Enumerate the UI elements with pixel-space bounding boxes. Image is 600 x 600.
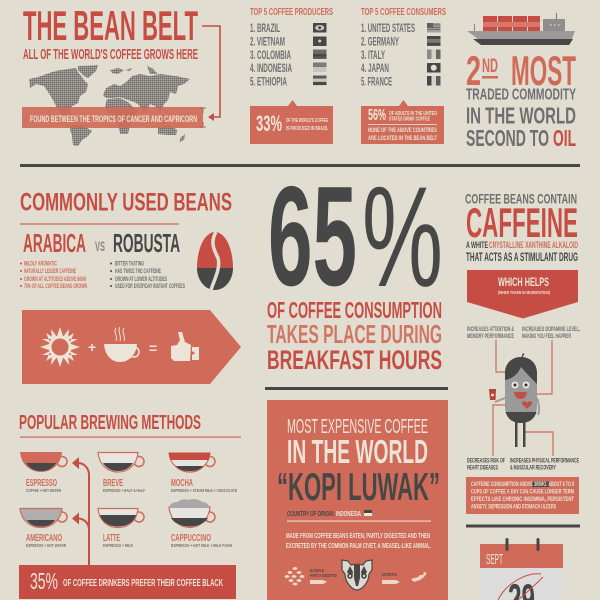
benefit: heart: HEART DISEASES bbox=[467, 464, 498, 472]
list: 5. FRANCE bbox=[361, 76, 392, 88]
callout: 35% black coffee: OF COFFEE DRINKERS PREFER THEIR COFFEE BLACK bbox=[63, 578, 223, 589]
list bbox=[361, 23, 415, 88]
text: traded commodity: SECOND TO bbox=[466, 125, 549, 151]
heading line 1: MOST EXPENSIVE COFFEE bbox=[287, 416, 428, 438]
label: eaten and partly digested: EATEN & bbox=[310, 568, 325, 573]
callout: 35% black coffee bbox=[19, 565, 236, 599]
arrow: which helps bbox=[467, 270, 578, 318]
callout: 56%: OF ADULTS IN THE UNITED bbox=[389, 111, 437, 117]
arabica bullet list: GROWN AT ALTITUDES ABOVE 800M bbox=[24, 276, 86, 283]
calendar: sept 29 bbox=[480, 538, 563, 600]
icon: coffee cup bbox=[104, 327, 139, 362]
cup: mocha: MOCHA bbox=[171, 478, 193, 489]
stat: 2nd most: 2 bbox=[466, 47, 481, 94]
benefit: attention bbox=[467, 326, 514, 340]
red circled mark bbox=[498, 574, 543, 600]
icon: coffee beans bbox=[284, 567, 304, 586]
benefit: physical performance: & MUSCULAR RECOVERY bbox=[510, 464, 556, 472]
list: 1. UNITED STATES bbox=[361, 23, 415, 35]
arabica bullet list: NATURALLY LESSER CAFFEINE bbox=[24, 268, 76, 275]
title: the bean belt: THE BEAN BELT bbox=[23, 2, 198, 49]
cup: breve: ESPRESSO + HALF & HALF bbox=[103, 488, 145, 493]
stat: 65 percent: 65 bbox=[268, 157, 357, 316]
panel: the bean belt bbox=[22, 2, 220, 146]
icon: container ship bbox=[467, 13, 575, 45]
text: takes place during: TAKES PLACE DURING bbox=[267, 319, 442, 349]
flags bbox=[427, 23, 440, 86]
callout: 56%: ARE LOCATED IN THE BEAN BELT bbox=[368, 136, 437, 142]
panel: caffeine bbox=[465, 190, 580, 528]
panel: top 5 consumers bbox=[361, 7, 446, 144]
country of origin: INDONESIA bbox=[336, 511, 361, 518]
cup: breve bbox=[98, 452, 145, 493]
label: excreted: EXCRETED bbox=[382, 572, 397, 577]
panel: top 5 producers bbox=[250, 7, 333, 144]
name: kopi luwak: “KOPI LUWAK” bbox=[277, 466, 440, 509]
callout: 33%: OF THE WORLD'S COFFEE bbox=[286, 118, 328, 124]
panel: 2nd most traded bbox=[466, 13, 576, 151]
cup: latte: ESPRESSO + MILK bbox=[103, 543, 134, 548]
cup: espresso: ESPRESSO bbox=[26, 478, 57, 489]
arrow: which helps: WHICH HELPS bbox=[498, 275, 549, 289]
icon: thumbs up bbox=[171, 332, 199, 361]
tropics band bbox=[22, 107, 203, 128]
benefit: physical performance bbox=[510, 458, 579, 472]
cup: cappuccino: ESPRESSO + HOT MILK + MILK FOAM bbox=[171, 543, 232, 548]
heading: TOP 5 COFFEE CONSUMERS bbox=[361, 7, 446, 18]
text: definition: A WHITE bbox=[466, 240, 488, 250]
list: 4. INDONESIA bbox=[250, 63, 292, 75]
equals sign: = bbox=[149, 340, 157, 356]
stat: 65 percent: % bbox=[362, 158, 443, 317]
text: definition bbox=[466, 240, 578, 264]
list: 4. JAPAN bbox=[361, 63, 389, 75]
robusta bullet list bbox=[110, 260, 185, 290]
icon: coffee bean character bbox=[489, 353, 539, 447]
arabica bullet list: 70% OF ALL COFFEE BEANS GROWN bbox=[24, 283, 87, 290]
panel: popular brewing methods bbox=[19, 412, 241, 599]
connector lines bbox=[493, 340, 553, 456]
heading line 2: IN THE WORLD bbox=[287, 433, 428, 470]
robusta bullet list: GROWN AT LOWER ALTITUDES bbox=[115, 276, 167, 283]
band label: FOUND BETWEEN THE TROPICS OF CANCER AND CAPRICORN bbox=[30, 114, 197, 125]
label: eaten and partly digested bbox=[310, 568, 337, 584]
robusta bullet list: USED FOR EVERYDAY INSTANT COFFEES bbox=[115, 283, 185, 290]
description: MADE FROM COFFEE BEANS EATEN, PARTLY DIGESTED AND THEN bbox=[286, 533, 430, 540]
callout: 33%: 33% bbox=[256, 111, 282, 136]
world dot map bbox=[29, 65, 190, 146]
heading: COMMONLY USED BEANS bbox=[20, 188, 232, 216]
list: 3. ITALY bbox=[361, 50, 385, 62]
callout: 35% black coffee: 35% bbox=[30, 568, 58, 594]
cup: latte: LATTE bbox=[103, 533, 120, 544]
robusta bullet list: BITTER TASTING bbox=[115, 260, 144, 268]
heading: POPULAR BREWING METHODS bbox=[19, 412, 201, 434]
list: 5. ETHIOPIA bbox=[250, 76, 287, 88]
plus sign: + bbox=[88, 339, 96, 355]
cup: americano: AMERICANO bbox=[26, 533, 62, 544]
heading: TOP 5 COFFEE PRODUCERS bbox=[250, 7, 333, 18]
robusta bullet list: HAS TWICE THE CAFFEINE bbox=[115, 268, 161, 275]
cup: espresso bbox=[20, 452, 67, 493]
description bbox=[286, 533, 431, 550]
calendar: sept 29: SEPT bbox=[486, 551, 503, 568]
callout: 56%: 56% bbox=[368, 107, 386, 124]
cup: breve: BREVE bbox=[103, 478, 123, 489]
text: traded commodity bbox=[466, 86, 576, 151]
cup: cappuccino bbox=[169, 499, 232, 548]
benefit: dopamine bbox=[522, 326, 580, 340]
benefit: heart: DECREASES RISK OF bbox=[467, 458, 505, 464]
callout: 56% bbox=[361, 100, 444, 144]
description: EXCRETED BY THE COMMON PALM CIVET, A WEASEL-LIKE ANIMAL. bbox=[286, 543, 431, 550]
list: 2. VIETNAM bbox=[250, 36, 285, 48]
cup: mocha bbox=[169, 453, 237, 493]
label: eaten and partly digested: PARTLY DIGESTED bbox=[310, 573, 337, 578]
text: traded commodity: OIL bbox=[553, 125, 576, 151]
list: 2. GERMANY bbox=[361, 36, 399, 48]
text: breakfast hours: BREAKFAST HOURS bbox=[267, 345, 442, 375]
warning box bbox=[466, 477, 579, 514]
callout: 33%: IS PRODUCED IN BRAZIL bbox=[286, 126, 328, 132]
flags bbox=[313, 23, 326, 85]
stat: 2nd most bbox=[466, 47, 576, 94]
arabica bullet list: MILDLY AROMATIC bbox=[24, 260, 57, 268]
panel: kopi luwak bbox=[267, 400, 448, 600]
country of origin: COUNTRY OF ORIGIN: bbox=[287, 511, 335, 518]
callout: 56%: STATES DRINK COFFEE bbox=[389, 116, 430, 122]
benefit: attention: MEMORY PERFORMANCE bbox=[467, 333, 514, 340]
benefit: heart bbox=[467, 458, 505, 472]
arrow: which helps: (WHEN TAKEN IN MODERATION) bbox=[498, 290, 550, 295]
icon: coffee bean bbox=[197, 232, 233, 290]
text: of coffee consumption: OF COFFEE CONSUMPTION bbox=[267, 297, 442, 323]
label: excreted bbox=[382, 572, 400, 584]
stat: 2nd most: ND bbox=[482, 56, 498, 77]
panel: commonly used beans bbox=[20, 188, 233, 290]
arrows from black coffee bar bbox=[72, 457, 89, 566]
list: 3. COLOMBIA bbox=[250, 50, 291, 62]
label: arabica: ARABICA bbox=[23, 228, 86, 258]
label: vs: VS bbox=[95, 238, 105, 254]
tick marks bbox=[200, 108, 206, 127]
cup: cappuccino: CAPPUCCINO bbox=[171, 533, 211, 544]
cup: mocha: ESPRESSO + STEAM MILK + CHOCOLATE bbox=[171, 488, 237, 493]
panel: 65% breakfast stat bbox=[265, 157, 448, 390]
list bbox=[250, 23, 292, 88]
callout: 56%: NONE OF THE ABOVE COUNTRIES bbox=[368, 128, 437, 134]
subtitle: ALL OF THE WORLD'S COFFEE GROWS HERE bbox=[23, 47, 198, 63]
cup: americano bbox=[20, 508, 67, 548]
label: robusta: ROBUSTA bbox=[113, 228, 180, 258]
panel: breakfast arrow banner bbox=[22, 310, 241, 384]
icon: excreted beans bbox=[411, 572, 427, 582]
cup: latte bbox=[98, 508, 144, 548]
list: 1. BRAZIL bbox=[250, 23, 280, 35]
icon: sun bbox=[40, 327, 80, 367]
callout: 33% bbox=[250, 100, 333, 144]
benefit: attention: INCREASES ATTENTION & bbox=[467, 326, 514, 333]
arrow to band bbox=[202, 26, 220, 121]
icon: civet face bbox=[342, 560, 372, 590]
arabica bullet list bbox=[20, 260, 87, 290]
cup: americano: ESPRESSO + HOT WATER bbox=[26, 543, 67, 548]
cup: espresso: COFFEE + HOT WATER bbox=[26, 488, 62, 493]
